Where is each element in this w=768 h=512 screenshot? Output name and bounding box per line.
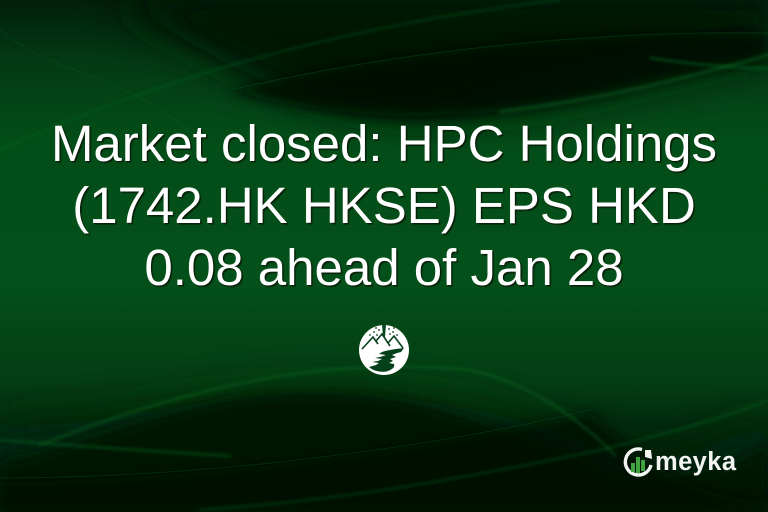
title: 0.08 ahead of Jan 28 [144, 239, 624, 296]
title: (1742.HK HKSE) EPS HKD [72, 177, 696, 234]
title: Market closed: HPC Holdings [51, 115, 717, 172]
logo: meyka [624, 447, 736, 477]
soft dark top and bottom masses [0, 0, 768, 115]
wordmark: meyka [655, 448, 736, 476]
title [51, 115, 717, 296]
icon: meyka ring with bars [624, 447, 653, 477]
icon: company logo, mountains and river [359, 325, 409, 375]
